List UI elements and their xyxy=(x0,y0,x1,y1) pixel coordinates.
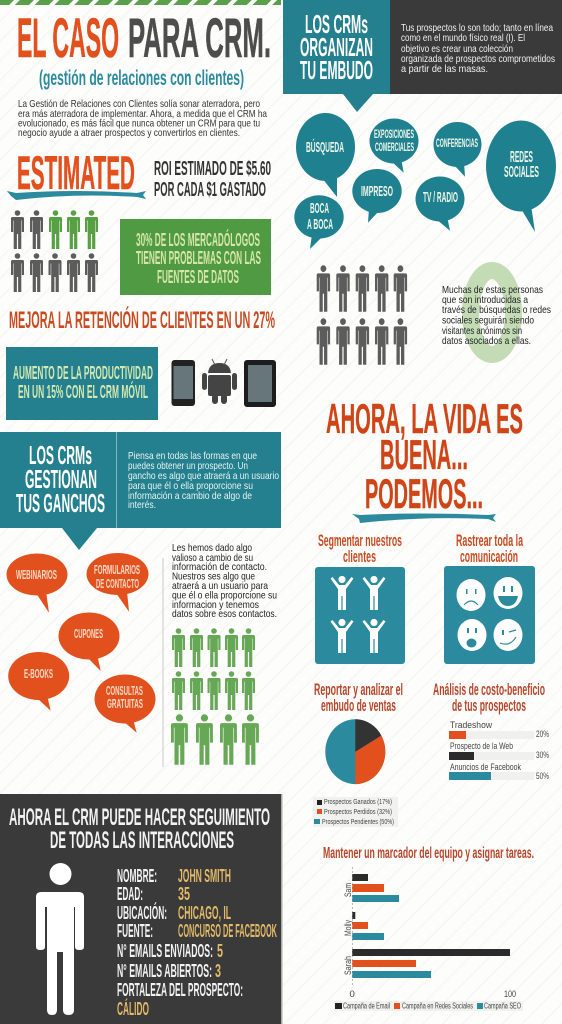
text: hooks explanation: valioso a cambio de su xyxy=(172,552,253,564)
scoreboard legend: Campaña SEO xyxy=(484,1002,521,1010)
top stripe xyxy=(0,0,281,5)
text: hooks explanation: que él o ella proporcione su xyxy=(172,590,277,602)
text: anonymous visitors: sociales seguirán siendo xyxy=(442,314,534,326)
intro paragraph xyxy=(18,98,267,139)
bar chart: team scoreboard: Sarah xyxy=(343,956,354,975)
contact record: JOHN SMITH xyxy=(178,866,231,886)
bubble: consultas: CONSULTAS xyxy=(106,683,143,698)
panel: tracking interactions xyxy=(0,794,282,1024)
panel: crms manage hooks: TUS GANCHOS xyxy=(16,488,105,518)
green people xyxy=(171,628,259,765)
pie chart xyxy=(325,719,385,784)
bubble: busqueda: BÚSQUEDA xyxy=(306,138,344,156)
bubble: exposiciones xyxy=(370,118,418,173)
bar chart: cost benefit: Anuncios de Facebook xyxy=(450,762,521,772)
panel: crms manage hooks xyxy=(0,432,281,550)
bubble: conferencias xyxy=(434,122,482,177)
ribbon xyxy=(7,191,146,200)
text: hooks explanation: Les hemos dado algo xyxy=(172,542,252,554)
panel: 30 percent callout: FUENTES DE DATOS xyxy=(157,267,239,287)
contact record: 5 xyxy=(217,941,223,961)
heading: cost benefit xyxy=(433,680,545,715)
panel: crms organize funnel: TU EMBUDO xyxy=(300,55,373,85)
text: anonymous visitors: que son introducidas a xyxy=(442,294,528,306)
roi text xyxy=(154,158,271,201)
bubble: cupones: CUPONES xyxy=(74,626,103,641)
teal bubbles xyxy=(294,113,556,249)
teal bubbles: CONFERENCIAS xyxy=(436,136,478,150)
heading: life is good: BUENA... xyxy=(380,431,468,478)
panel: productivity callout: EN UN 15% CON EL CRM MÓVIL xyxy=(18,381,148,402)
panel: segment icons xyxy=(315,567,405,664)
heading: segment xyxy=(318,531,402,566)
heading: life is good xyxy=(326,395,523,517)
intro paragraph: era más aterradora de implementar. Ahora, a medida que el CRM ha xyxy=(18,108,267,120)
contact record: UBICACIÓN: xyxy=(117,902,167,923)
text: hooks explanation: datos sobre esos contactos. xyxy=(172,608,277,620)
bubble: boca a boca: BOCA xyxy=(310,200,329,217)
bubble: formularios: DE CONTACTO xyxy=(96,576,139,591)
bubble: impreso xyxy=(352,169,402,223)
text: hooks explanation: información de contacto. xyxy=(172,561,267,573)
bubble: formularios: FORMULARIOS xyxy=(94,562,140,577)
bubble: busqueda xyxy=(296,113,355,197)
bubble: redes sociales xyxy=(486,120,556,232)
text: TIENEN PROBLEMAS CON LAS xyxy=(136,248,261,268)
heading: segment: Segmentar nuestros xyxy=(318,531,402,550)
icon: tablet xyxy=(244,360,276,407)
contact record: CHICAGO, IL xyxy=(178,903,231,923)
intro paragraph: La Gestión de Relaciones con Clientes solía sonar aterradora, pero xyxy=(18,98,260,110)
bubble: formularios xyxy=(86,553,148,612)
text: ESTIMATED xyxy=(17,146,135,199)
text: POR CADA $1 GASTADO xyxy=(154,179,266,201)
heading: segment: clientes xyxy=(343,547,376,566)
panel: 30 percent callout xyxy=(120,219,271,295)
bar chart: cost benefit xyxy=(449,720,549,781)
panel: funnel description: como en el mundo físico real (I). El xyxy=(401,32,525,44)
ribbon xyxy=(352,514,496,523)
bubble: cupones xyxy=(58,612,120,671)
bar chart: cost benefit: 30% xyxy=(536,750,549,760)
bar chart: cost benefit: Tradeshow xyxy=(450,720,492,730)
contact record: 35 xyxy=(178,884,190,904)
contact record xyxy=(117,866,277,1019)
heading: report: Reportar y analizar el xyxy=(314,680,403,699)
bubble: boca a boca xyxy=(294,195,344,249)
text: anonymous visitors: visitantes anónimos sin xyxy=(442,325,522,337)
scoreboard legend xyxy=(334,1001,523,1011)
bar chart: team scoreboard: 0 xyxy=(350,989,355,1000)
panel: crms manage hooks: GESTIONAN xyxy=(25,464,97,494)
title: EL CASO xyxy=(17,6,119,69)
bar chart: cost benefit: Prospecto de la Web xyxy=(450,741,513,751)
panel: crms manage hooks: información a cambio de algo de xyxy=(128,490,252,502)
bar chart: team scoreboard: Molly xyxy=(343,920,354,936)
panel: funnel description xyxy=(390,0,562,94)
panel: crms manage hooks: gancho es algo que atraerá a un usuario xyxy=(128,470,279,482)
bubble: boca a boca: A BOCA xyxy=(307,216,333,233)
bar chart: team scoreboard xyxy=(343,867,516,1000)
teal bubbles: COMERCIALES xyxy=(375,140,414,154)
text: hooks explanation: informacion y tenemos xyxy=(172,599,259,611)
bar chart: cost benefit: 20% xyxy=(536,729,549,739)
intro paragraph: evolucionado, es más fácil que nunca obtener un CRM para que tu xyxy=(18,118,260,130)
bar chart: team scoreboard: 100 xyxy=(504,989,516,1000)
panel: crms organize funnel: LOS CRMs xyxy=(305,9,368,39)
contact record: CÁLIDO xyxy=(117,998,149,1019)
bar chart: team scoreboard: Sam xyxy=(343,883,354,897)
contact record: 3 xyxy=(215,961,221,981)
panel: crms manage hooks: LOS CRMs xyxy=(29,440,92,470)
bubble: impreso: IMPRESO xyxy=(361,183,393,200)
text: CONCURSO DE FACEBOOK xyxy=(178,921,277,941)
contact record: EDAD: xyxy=(117,884,143,904)
contact record: FUENTE: xyxy=(117,921,153,941)
bar chart: cost benefit: 50% xyxy=(536,771,549,781)
bubble: tv radio: TV / RADIO xyxy=(423,189,458,206)
heading: report xyxy=(314,680,403,715)
panel: funnel description: a partir de las masas. xyxy=(401,63,488,75)
pie legend: Prospectos Ganados (17%) xyxy=(324,799,392,806)
pie legend xyxy=(313,797,398,827)
bubble: tv radio xyxy=(416,176,464,231)
panel: tracking interactions: AHORA EL CRM PUEDE HACER SEGUIMIENTO xyxy=(9,804,270,831)
panel: crms manage hooks: puedes obtener un prospecto. Un xyxy=(128,460,248,472)
heading: track xyxy=(456,531,523,566)
text: PARA CRM. xyxy=(128,6,271,69)
text: hooks explanation: Nuestros ses algo que xyxy=(172,570,255,582)
contact record: N° EMAILS ABIERTOS: xyxy=(117,961,212,981)
bubble: webinarios xyxy=(6,554,68,613)
bubble: e-books xyxy=(8,652,69,711)
contact record: N° EMAILS ENVIADOS: xyxy=(117,941,213,961)
panel: crms manage hooks: interés. xyxy=(128,499,156,511)
text: 30% DE LOS MERCADÓLOGOS xyxy=(136,229,260,250)
panel: crms organize funnel: ORGANIZAN xyxy=(300,32,373,62)
icon: android xyxy=(202,359,237,404)
icon: phone xyxy=(172,360,195,406)
panel: crms manage hooks: para que él o ella proporcione su xyxy=(128,480,253,492)
text: hooks explanation: atraerá a un usuario para xyxy=(172,580,268,592)
text: ROI ESTIMADO DE $5.60 xyxy=(154,158,271,180)
panel: crms organize funnel xyxy=(283,0,390,112)
panel: funnel description: objetivo es crear una colección xyxy=(401,43,513,55)
big zero xyxy=(470,270,514,354)
bubble: consultas: GRATUITAS xyxy=(107,696,143,711)
intro paragraph: negocio ayude a atraer prospectos y convertirlos en clientes. xyxy=(18,127,240,139)
vertical divider xyxy=(162,558,164,767)
panel heading: DE TODAS LAS INTERACCIONES xyxy=(50,827,234,854)
panel: face icons xyxy=(444,566,535,664)
panel heading xyxy=(9,804,270,854)
text: hooks explanation xyxy=(172,542,277,620)
teal bubbles: EXPOSICIONES xyxy=(374,127,414,141)
pie legend: Prospectos Perdidos (32%) xyxy=(324,809,392,816)
people: 30 percent xyxy=(11,210,98,292)
contact record: NOMBRE: xyxy=(117,866,157,886)
icon: person xyxy=(36,863,84,1015)
subtitle: (gestión de relaciones con clientes) xyxy=(39,67,244,90)
heading: report: embudo de ventas xyxy=(321,696,396,715)
bubble: consultas xyxy=(94,674,156,733)
bubble: e-books: E-BOOKS xyxy=(24,666,53,681)
scoreboard legend: Campaña de Email xyxy=(343,1002,390,1010)
grey people: visitors xyxy=(317,265,407,365)
contact record: FORTALEZA DEL PROSPECTO: xyxy=(117,980,243,1000)
text: anonymous visitors: datos asociados a ellas. xyxy=(442,335,531,347)
scoreboard legend: Campaña en Redes Sociales xyxy=(402,1002,473,1010)
pie legend: Prospectos Pendientes (50%) xyxy=(322,819,394,826)
panel: crms manage hooks: Piensa en todas las formas en que xyxy=(128,450,257,462)
text: anonymous visitors xyxy=(442,284,551,347)
orange bubbles xyxy=(6,553,156,733)
bubble: webinarios: WEBINARIOS xyxy=(16,567,57,582)
text: AUMENTO DE LA PRODUCTIVIDAD xyxy=(13,363,153,383)
panel: productivity callout xyxy=(6,347,158,420)
